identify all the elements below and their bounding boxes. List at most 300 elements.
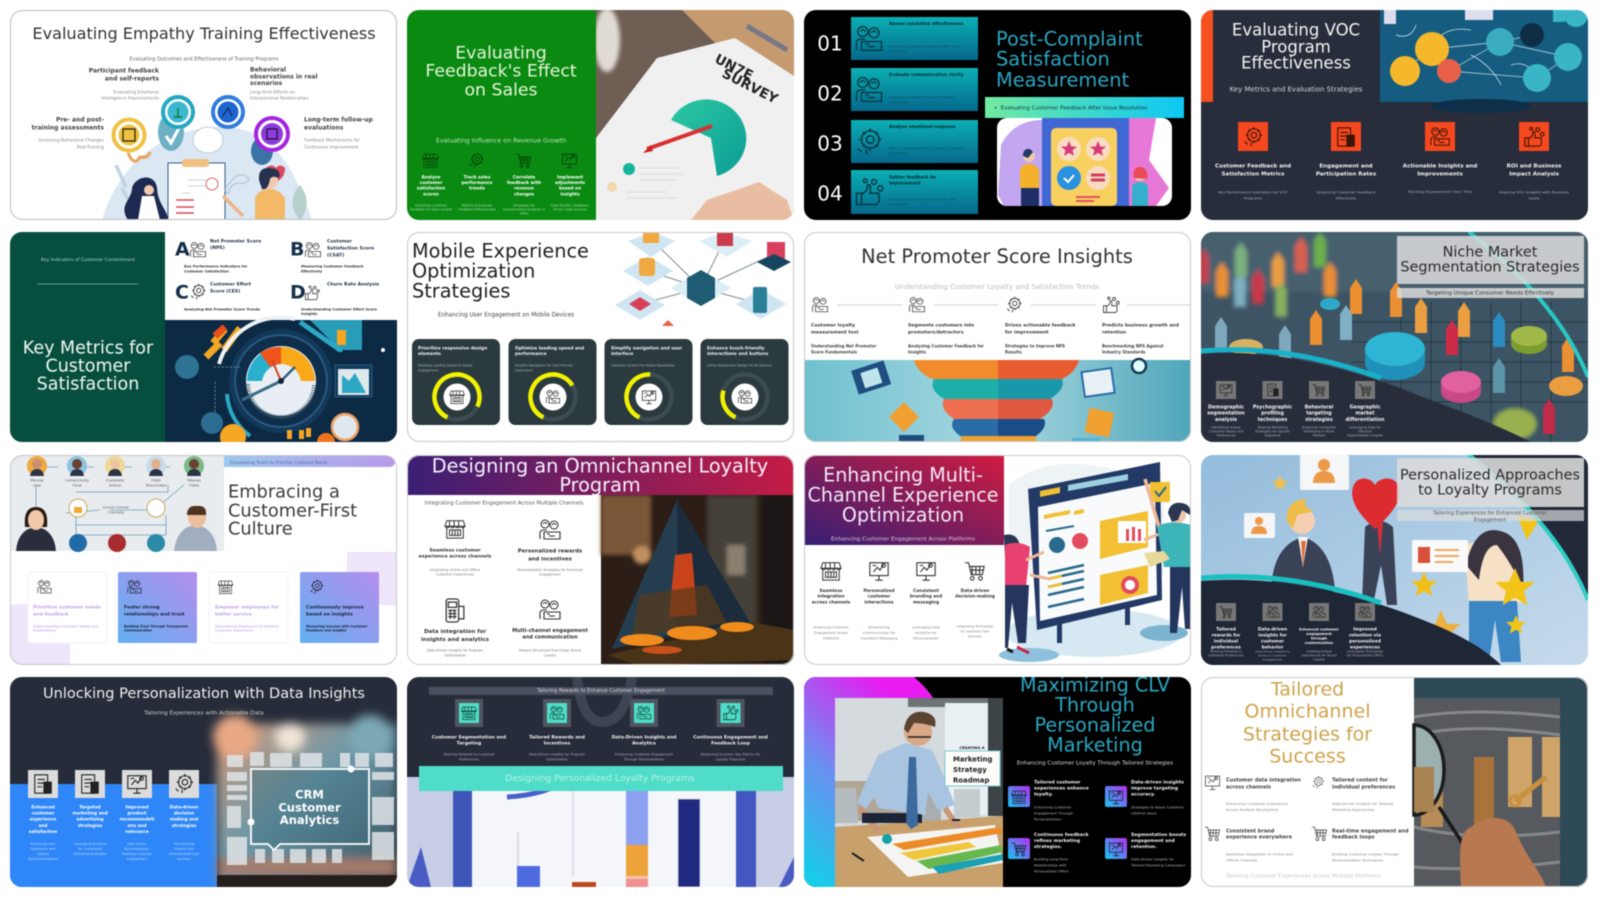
benefit 2: Enhance Customer [1258, 654, 1287, 658]
pillar 2: Optimization [546, 758, 568, 762]
segment: behavioral: Markets [1313, 434, 1326, 438]
item: behavioral observations: Behavioral [250, 66, 286, 73]
segment: psychographic: Tailoring Marketing [1256, 426, 1288, 430]
benefit 4: experiences [1350, 644, 1380, 650]
subtitle: Enhancing User Engagement on Mobile Devices [438, 313, 574, 319]
item: long-term follow-up [304, 116, 374, 150]
action labels [417, 174, 586, 197]
point 4: Tailored Marketing Campaigns [1130, 864, 1185, 868]
title: Through [1054, 693, 1135, 716]
metric: ROI: Aligning VOC Insights with Business [1499, 189, 1569, 194]
action labels: Track sales [464, 174, 491, 180]
point 4: engagement and [1131, 838, 1175, 844]
item: multi-channel [512, 600, 588, 658]
action labels: feedback with [507, 180, 541, 186]
title: Success [1269, 746, 1346, 768]
item: multi-channel: Loyalty [544, 654, 556, 658]
card 3: Customer Experience [215, 629, 253, 633]
step 01: Analyzing Customer Feedback After Issue [889, 45, 959, 49]
illustration: two people at dashboard [999, 462, 1191, 662]
image: market segment pegs [1197, 232, 1588, 442]
point 2: improve targeting [1131, 785, 1178, 791]
slide: Evaluating Empathy Training Effectiveness [31, 26, 376, 220]
slide: Niche Market Segmentation Strategies [1197, 232, 1588, 442]
metric C: Analyzing Net Promoter Score Trends [184, 308, 260, 312]
metric: ROI: Goals [1529, 195, 1539, 200]
image: CRM customer analytics: Customer [278, 801, 341, 815]
step 03: 03 [817, 132, 843, 156]
highlight band [985, 97, 1184, 118]
segment: behavioral: Positioning in Niche [1303, 430, 1335, 434]
illustration: people and loyalty heart [1244, 455, 1539, 662]
item: data integration [1205, 776, 1301, 812]
item: data integration [421, 599, 490, 658]
step 02: 02 [817, 82, 843, 106]
benefit 1: Individual Preferences [1208, 654, 1244, 658]
metric B: Measuring Customer Feedback [301, 265, 364, 269]
photo: strategy roadmap meeting: Roadmap [953, 777, 989, 785]
feature 3: Personalization [913, 637, 939, 641]
segment: psychographic [1253, 381, 1292, 438]
metric A: (NPS) [210, 245, 225, 251]
segment: psychographic: Strategies for Specific [1255, 430, 1290, 434]
tile 1: Engagement [418, 369, 439, 373]
header panel [804, 455, 1004, 545]
item: data integration: Enhancing Customer Experience [1226, 801, 1289, 806]
item: pre and post assessments: Pre- and post- [56, 116, 105, 123]
card 2: Foster strong [124, 604, 160, 610]
title: Channel Experience [808, 483, 998, 506]
point 3: Continuous feedback [1034, 832, 1089, 838]
step 03 [817, 120, 978, 163]
item: long-term follow-up: evaluations [304, 124, 344, 131]
step 1 [811, 298, 876, 354]
tile 3 [604, 339, 692, 427]
photo: survey on clipboard: SURVEY [719, 66, 781, 108]
item: data integration: Data-Driven Insights for Program [427, 649, 484, 653]
step 3: Drives actionable feedback [1005, 322, 1076, 328]
step 04 [817, 170, 978, 214]
descriptions: Feedback Effectiveness [458, 208, 496, 212]
item: participant feedback: and self-reports [105, 75, 159, 82]
image: bar chart [407, 777, 794, 887]
tile 1: elements [418, 351, 441, 357]
metric A: A [175, 239, 190, 261]
item: seamless: Seamless customer [429, 547, 481, 553]
highlight band: • Evaluating Customer Feedback After Issue Resolution [994, 106, 1148, 112]
segment: psychographic: profiling [1261, 410, 1284, 416]
feature 2: Communication for [863, 631, 896, 635]
title: Omnichannel [1245, 701, 1370, 723]
item: personalized: Engagement [539, 573, 561, 577]
slide: Tailored Omnichannel Strategies for Success [1201, 677, 1588, 887]
feature 3: messaging [913, 599, 939, 605]
subtitle panel: Targeting Unique Consumer Needs Effectively [1425, 291, 1555, 297]
column 3: Data-Driven [127, 842, 147, 846]
title panel: Personalized Approaches [1400, 468, 1580, 484]
feature 1: Seamless [820, 588, 843, 594]
metric D: D [290, 282, 306, 304]
column 2: advertising [76, 816, 104, 822]
pillar 4 [693, 699, 768, 762]
subtitle panel: Tailoring Experiences for Enhanced Customer [1432, 511, 1548, 517]
column 2 [72, 770, 108, 856]
column 3: Boosting Customer [122, 852, 153, 856]
photo: glowing data pyramid [601, 495, 794, 665]
benefit 3: Enhanced customer [1299, 628, 1339, 632]
left panel [407, 10, 596, 220]
item: long-term follow-up: Feedback Mechanisms for [304, 137, 360, 143]
image: CRM customer analytics: Analytics [280, 813, 339, 827]
benefit 4: for Personalized Offers [1347, 654, 1383, 658]
icons row [423, 153, 577, 168]
point 1: Engagement Through [1034, 812, 1073, 816]
point 1: Personalization [1034, 817, 1061, 821]
segment: demographic [1207, 381, 1245, 438]
benefit 3: engagement [1306, 632, 1332, 636]
segment: geographic: Effective [1358, 430, 1372, 434]
tile 4 [700, 339, 788, 427]
segment: behavioral: Behavioral [1305, 404, 1334, 410]
step 01: Assess resolution effectiveness [889, 21, 964, 26]
segment: demographic: Consumer Needs and [1209, 430, 1243, 434]
step 1: Customer loyalty [811, 322, 855, 328]
title band [419, 766, 783, 791]
title panel [1397, 458, 1584, 507]
title: Key Metrics for [23, 339, 154, 359]
item: brand experience: Offline Channels [1226, 857, 1257, 862]
action labels: changes [514, 191, 534, 197]
point 3: refines marketing [1034, 838, 1080, 844]
action labels: performance [462, 180, 493, 186]
timeline connectors [837, 304, 1191, 306]
segment: geographic [1345, 381, 1385, 438]
point 3 [1008, 832, 1089, 873]
feature 1: Platforms [823, 637, 839, 641]
dark wave panel [1201, 580, 1501, 665]
metric A: Key Performance Indicators for [184, 265, 248, 269]
benefit 3: Creating Unique [1306, 650, 1332, 654]
item: behavioral observations [250, 66, 318, 101]
metric: feedback: Key Performance Indicators for VOC [1218, 189, 1288, 194]
metric D: Insights [301, 312, 317, 316]
metric: engagement: Engagement and [1319, 164, 1373, 170]
step 01: 01 [817, 32, 843, 56]
column 4 [169, 770, 200, 861]
point 3: Building Long-Term [1034, 858, 1069, 862]
card 1 [28, 572, 107, 643]
feature 3: Leveraging Data [912, 626, 940, 630]
step 04: 04 [817, 182, 843, 206]
step 02: Evaluate communication clarity [889, 72, 964, 77]
column 2: Leveraging Analytics [73, 842, 107, 846]
benefit 3: through [1311, 637, 1328, 641]
column 1: and [38, 823, 48, 829]
step 3: Strategies to Improve NPS [1005, 343, 1065, 348]
benefit 2: Data-driven [1258, 626, 1287, 632]
slide: Embracing a Customer-First Culture [10, 455, 397, 665]
kicker: Key Indicators of Customer Contentment [41, 257, 135, 263]
pillar 3: Analytics [632, 740, 656, 746]
title: Marketing [1047, 733, 1143, 756]
item: seamless: Integrating Online and Offline [430, 568, 480, 572]
column 1: Experience with [30, 847, 56, 851]
card 3 [209, 572, 288, 643]
column 2: strategies [78, 823, 103, 829]
column 4: Journeys [176, 857, 191, 861]
metric C: C [175, 282, 189, 304]
benefit 3: Loyalty [1313, 658, 1325, 662]
step 03: Tools for Assessing Post-Complaint Customer [888, 147, 966, 151]
tag band: Empowering Teams to Prioritize Customer Needs [230, 460, 328, 465]
benefit 2 [1255, 603, 1290, 662]
descriptions: Metrics to Evaluate [462, 204, 492, 208]
point 4: Segmentation boosts [1131, 832, 1187, 838]
feature 3: Analytics for [915, 631, 937, 635]
slide: Net Promoter Score Insights [804, 232, 1191, 447]
step 2: Analyzing Customer Feedback for [908, 343, 984, 348]
title: Strategies [412, 279, 510, 302]
metric: insights: Improvements [1417, 172, 1463, 178]
metric A: Customer Satisfaction [184, 270, 229, 274]
image: org chart with people: Cronsaty [108, 509, 125, 514]
segment: geographic: Segmentation Insights [1347, 434, 1383, 438]
image: CRM customer analytics [213, 715, 397, 887]
slide: Evaluating Feedback's Effect on Sales [407, 8, 794, 220]
column 4: Data-driven [170, 804, 198, 810]
tile 1: Boosting Loading Speed for Better [418, 364, 474, 368]
benefit 1: rewards for [1212, 632, 1241, 638]
tag band [224, 456, 395, 467]
pillar 1: Tailoring Rewards to Customer [442, 753, 495, 757]
tile 4: interactions and buttons [707, 351, 769, 357]
feature 1 [812, 563, 851, 641]
item: behavioral observations: Interpersonal Relationships [250, 95, 309, 101]
image: network of customer signals [1380, 3, 1588, 113]
column 2: Marketing Strategies [73, 852, 107, 856]
item: data integration: Across Multiple Touchpoints [1226, 807, 1278, 812]
step 04: Complaints [889, 203, 908, 207]
item: seamless: experience across channels [419, 553, 492, 559]
feature 1: integration [817, 593, 845, 599]
feature 4: Data-driven [961, 588, 989, 594]
title: Culture [228, 518, 293, 539]
card 1: Expectations [33, 629, 56, 633]
action labels: Implement [557, 174, 583, 180]
header [407, 455, 794, 495]
action labels: based on [559, 185, 581, 191]
point 2: Data-driven insights [1131, 779, 1184, 785]
benefit 1: individual [1214, 638, 1239, 644]
action labels: Analyze [422, 174, 441, 180]
card 4: Feedback and Insights [306, 629, 347, 633]
feature 2: Streamlining [868, 626, 890, 630]
segment: geographic: differentiation [1345, 417, 1385, 423]
title: Customer-First [228, 500, 357, 521]
image: layered funnel [804, 359, 1191, 447]
item: tailored content: Marketing Approaches [1332, 807, 1375, 812]
illustration: rating app on phone [997, 118, 1172, 206]
card 2: Communication [124, 629, 153, 633]
descriptions: Driven Sales Success [553, 208, 587, 212]
metric: engagement [1316, 122, 1377, 200]
tile 4: Enhance touch-friendly [707, 345, 765, 351]
left panel [10, 232, 165, 442]
item: brand experience: Seamless Integration of Online and [1226, 851, 1294, 856]
image: isometric device network [615, 232, 791, 326]
title: Measurement [996, 68, 1130, 91]
title: Satisfaction [996, 47, 1110, 70]
title: Program [559, 473, 641, 496]
feature 2: customer [868, 593, 891, 599]
title panel [1397, 236, 1584, 284]
accent bar [1201, 10, 1213, 102]
metric A [175, 238, 261, 274]
pillar 3: Through Personalization [623, 758, 664, 762]
image: org chart with people [10, 455, 224, 552]
dark corner and teal sweep [1469, 455, 1588, 600]
title: Optimization [842, 503, 964, 526]
benefit 2: Data-Driven Insights to [1255, 650, 1290, 654]
feature 4: Journeys [967, 635, 982, 639]
feature 4: for Seamless User [961, 630, 990, 634]
point 2: Strategies to Boost Customer [1131, 806, 1185, 810]
action labels: adjustments [555, 180, 586, 186]
segment: demographic: Preferences [1217, 434, 1236, 438]
item: multi-channel: Multi-channel engagement [512, 628, 588, 634]
item: data integration: insights and analytics [421, 637, 490, 643]
image: org chart with people: Ciaxwlaty [106, 477, 125, 482]
step 03: Experience [889, 152, 908, 156]
metric B: (CSAT) [327, 252, 344, 258]
gradient frame [804, 677, 934, 887]
card 1: Understanding Customer Needs and [33, 625, 99, 629]
item: personalized [517, 520, 583, 577]
column 1: customer [32, 810, 55, 816]
photo: survey on clipboard [594, 8, 794, 220]
point 1: Tailored customer [1034, 779, 1081, 785]
slide: Evaluating VOC Program Effectiveness [1201, 3, 1588, 220]
slide: Designing Personalized Loyalty Programs [407, 677, 794, 887]
point 2: Lifetime Value [1131, 812, 1157, 816]
metric: ROI: Impact Analysis [1509, 172, 1560, 178]
metric B: Effectively [301, 270, 323, 274]
step 2 [908, 298, 984, 354]
card 1: and feedback [33, 611, 70, 617]
pillar 3: Enhancing Customer Engagement [615, 753, 674, 757]
benefit 4: Leveraging Technology [1347, 650, 1383, 654]
segment: demographic: segmentation [1207, 410, 1245, 416]
item: tailored content: Tailored content for [1332, 778, 1388, 784]
column 3: Engagement [127, 857, 148, 861]
metric A: Net Promoter Score [210, 238, 261, 244]
subtitle: Evaluating Outcomes and Effectiveness of Training Programs [129, 57, 279, 63]
footer caption: Tailoring Customer Experiences Across Multiple Platforms [1225, 874, 1381, 880]
photo: magnifier over wooden blocks [1414, 677, 1588, 887]
photo: survey on clipboard: UN7E [712, 51, 756, 84]
benefit 1: Tailored [1216, 626, 1236, 632]
item: behavioral observations: observations in real [250, 73, 318, 80]
segment: behavioral [1302, 381, 1337, 438]
metric: insights: Actionable Insights and [1403, 164, 1477, 170]
point 3: strategies. [1034, 844, 1062, 850]
column 2: Targeted [79, 804, 101, 810]
tile 3: Optimize Content for Mobile Readability [611, 364, 675, 368]
feature 3 [910, 563, 942, 641]
pillar 2: Tailored Rewards and [529, 734, 585, 740]
segment: geographic: Geographic [1350, 404, 1381, 410]
column 3: Improved [125, 804, 149, 810]
card 3: Empower employees for [215, 604, 279, 610]
tile 4: Utilize Responsive Design for All Devices [707, 364, 772, 368]
segment: demographic: Identifying Unique [1211, 426, 1241, 430]
subtitle: Key Metrics and Evaluation Strategies [1230, 86, 1363, 94]
metric B: B [290, 239, 304, 261]
step 04: Strategies to Enhance Satisfaction After [889, 198, 957, 202]
column 3 [120, 770, 155, 861]
column 1 [28, 770, 58, 861]
slide: Enhancing Multi-Channel Experience Optimization [804, 455, 1191, 665]
tile 2 [508, 339, 596, 427]
card 3: Empowering Employees to Enhance [215, 625, 279, 629]
title: Tailored [1270, 679, 1344, 701]
step 4: Predicts business growth and [1102, 322, 1179, 328]
item: participant feedback: Participant feedback [89, 67, 160, 74]
action labels: scores [423, 191, 439, 197]
subtitle: Evaluating Influence on Revenue Growth [436, 137, 566, 145]
item: data integration: Data integration for [424, 629, 486, 635]
action labels: insights [560, 191, 580, 197]
step 02: Analyzing Satisfaction Levels Following [889, 96, 955, 100]
step 1: Score Fundamentals [811, 349, 858, 354]
segment: geographic: market [1355, 410, 1375, 416]
benefit 1 [1208, 603, 1244, 658]
descriptions: Analyzing Customer [415, 204, 448, 208]
metric C [175, 281, 260, 312]
tile 2: performance [515, 351, 547, 357]
image: org chart with people: Juncal Conner [102, 504, 130, 509]
title: Maximizing CLV [1020, 673, 1170, 696]
feature 4 [955, 563, 995, 639]
card 1: Prioritize customer needs [33, 604, 101, 610]
item: seamless: Customer Experiences [436, 573, 474, 577]
step 4: Industry Standards [1102, 349, 1146, 354]
pillar 3: Data-Driven Insights and [612, 734, 676, 740]
title: Satisfaction [37, 375, 139, 395]
teal sweep [1469, 232, 1588, 377]
item: brand experience: experience everywhere [1226, 835, 1293, 841]
image: CRM customer analytics: CRM [295, 788, 324, 802]
metric: ROI [1499, 122, 1569, 200]
descriptions: Feedback for Sales Growth [410, 208, 452, 212]
subtitle panel [1397, 510, 1584, 524]
subtitle: Enhancing Customer Engagement Across Platforms [831, 537, 975, 543]
step 2: promoters/detractors [908, 329, 964, 335]
descriptions: Implementing Feedback in [503, 208, 545, 212]
step 01: Resolution [889, 50, 907, 54]
item: personalized: and incentives [528, 557, 572, 563]
step 3: for improvement [1005, 329, 1049, 335]
step 03: Analyze emotional response [889, 124, 956, 129]
feature 2: Consistent Messaging [860, 637, 898, 641]
image: org chart with people: Shecchape [146, 482, 167, 487]
step 4: retention [1102, 329, 1126, 335]
title: Feedback's Effect [425, 62, 577, 82]
card 4: Measuring Success with Customer [306, 625, 368, 629]
benefit 3: customization [1305, 641, 1334, 645]
title band: Designing Personalized Loyalty Programs [505, 773, 695, 784]
pillar 4: Continuous Engagement and [693, 734, 768, 740]
